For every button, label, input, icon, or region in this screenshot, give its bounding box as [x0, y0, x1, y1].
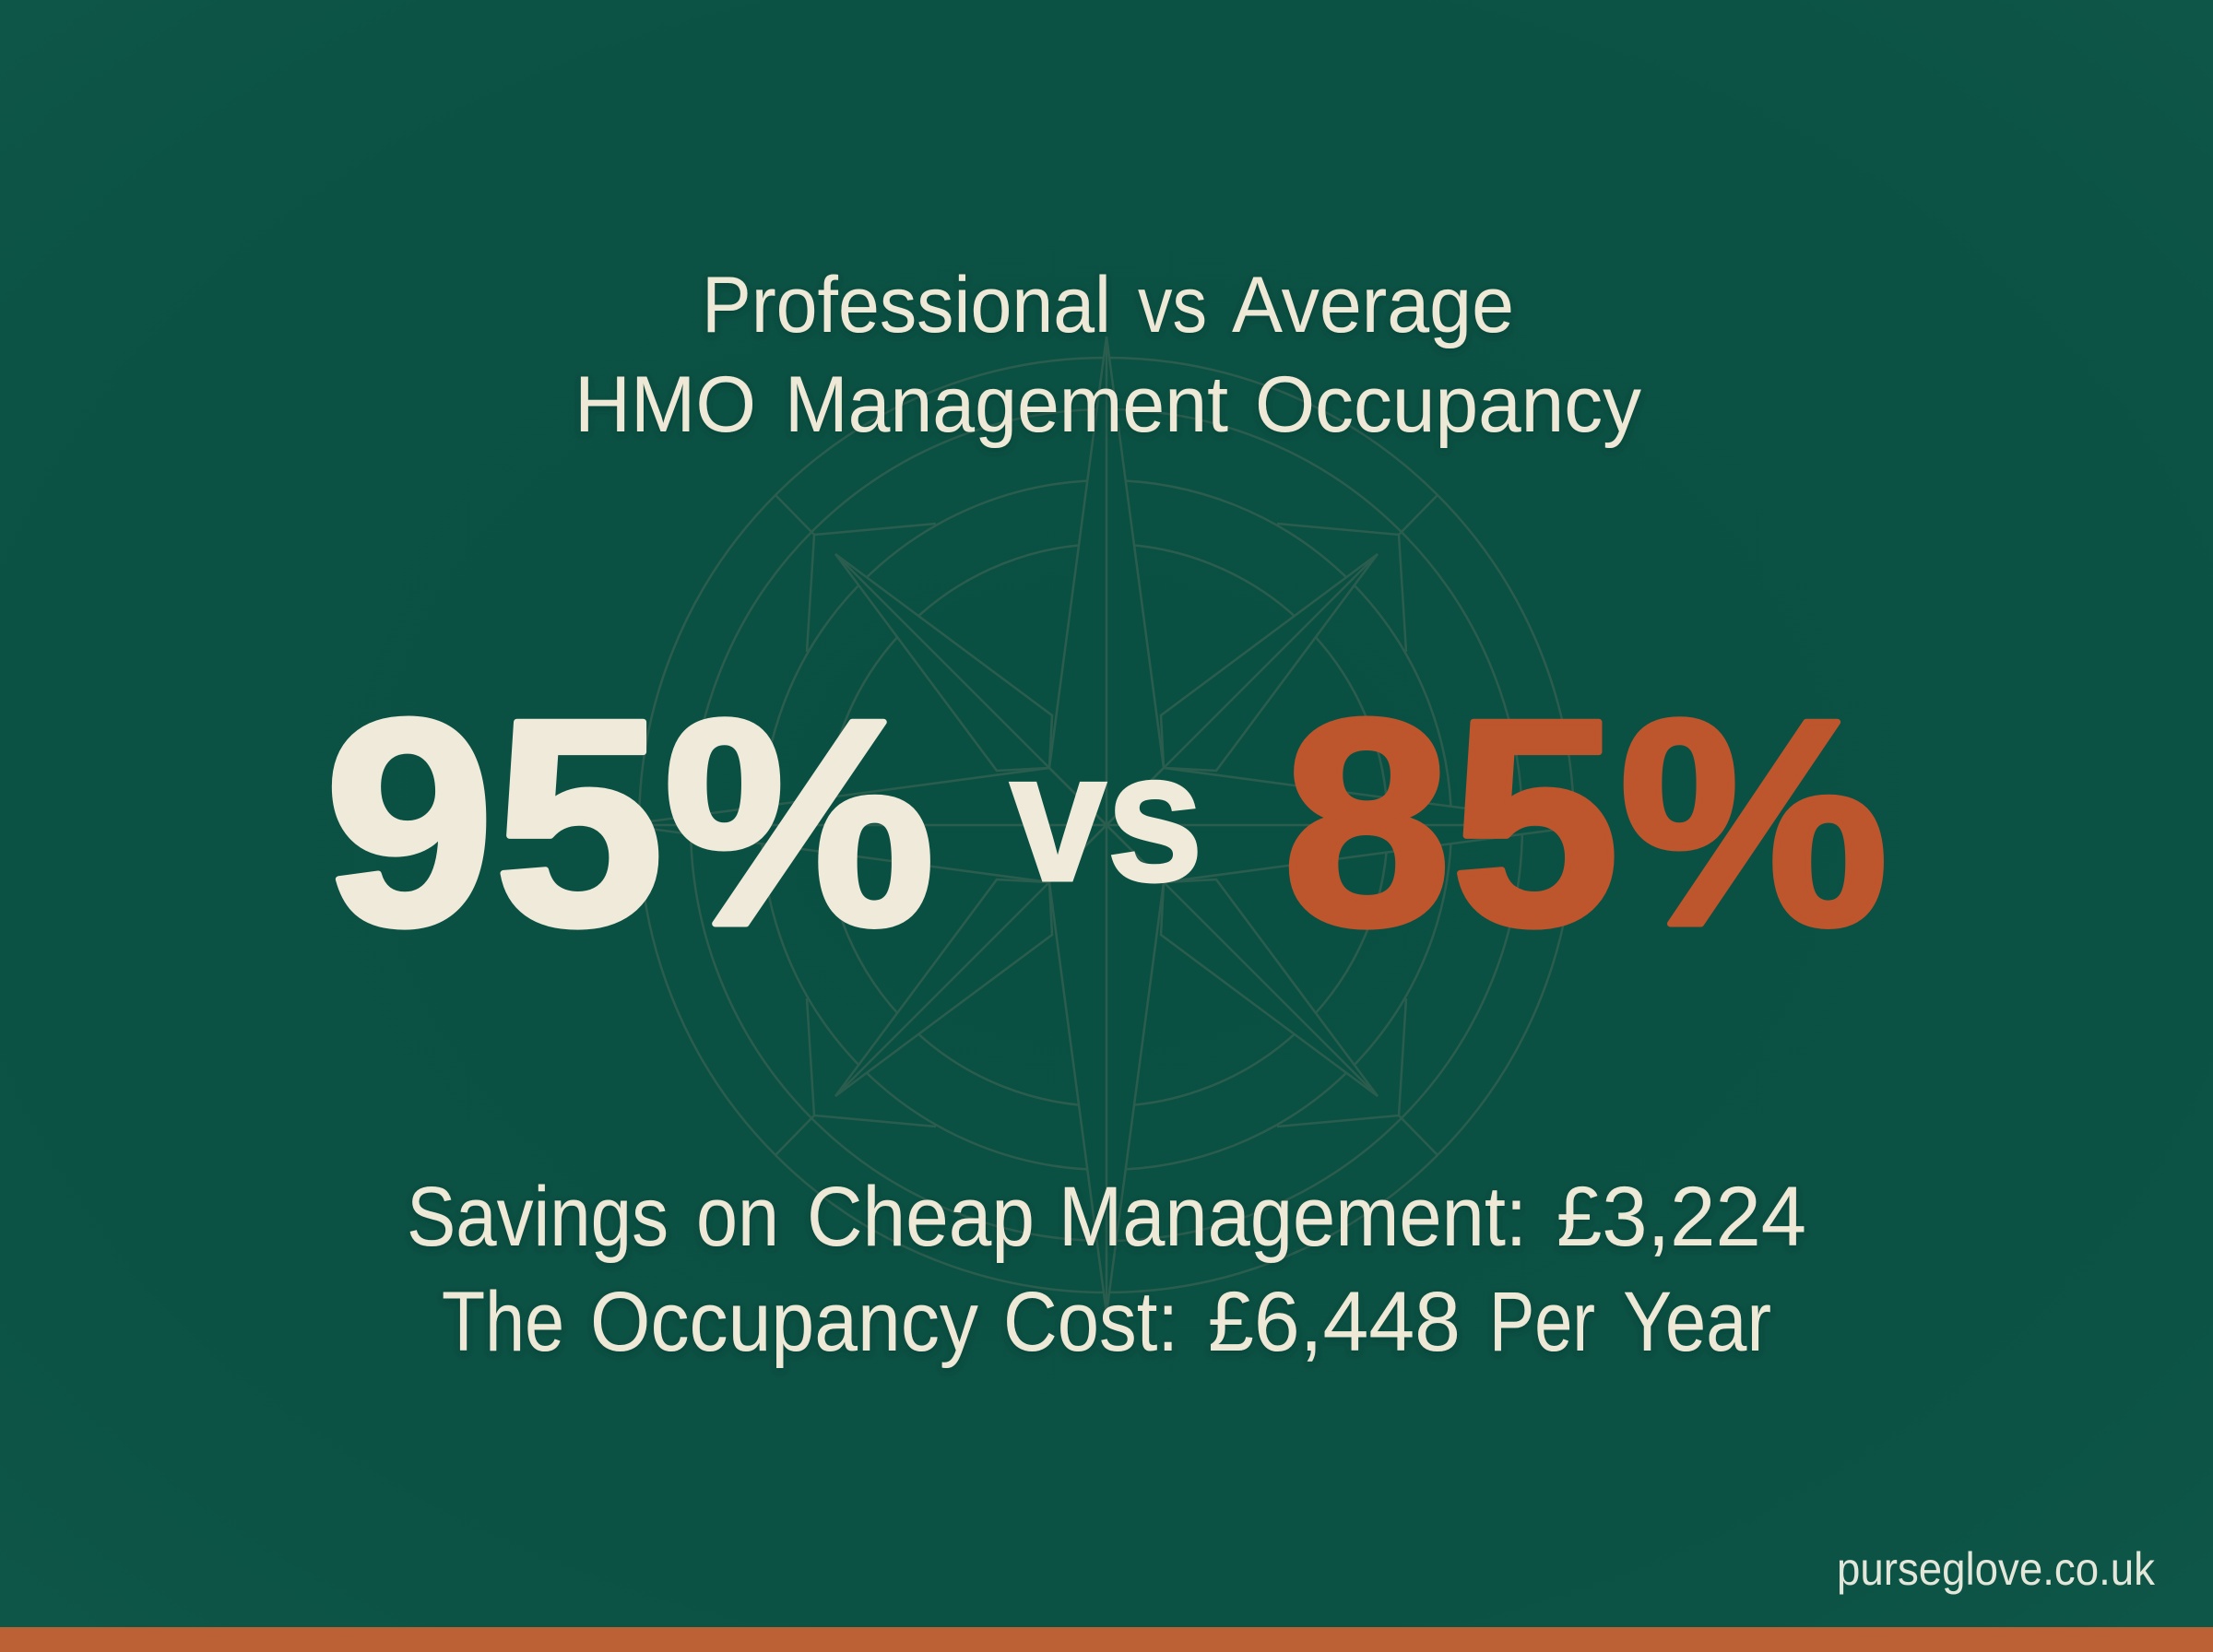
- savings and cost text: £3,224: [1556, 1170, 1806, 1264]
- orange footer bar: [0, 1627, 2213, 1652]
- title: Average: [1232, 261, 1514, 349]
- title: Professional: [702, 261, 1111, 349]
- savings and cost text: Occupancy: [590, 1275, 978, 1369]
- title: Management: [785, 360, 1228, 449]
- title: HMO: [574, 360, 756, 449]
- stat: professional 95%: 95%: [325, 659, 935, 986]
- savings and cost text: £6,448: [1208, 1275, 1461, 1369]
- stat: average 85%: 85%: [1283, 659, 1888, 986]
- title: [574, 261, 1641, 449]
- compass rose watermark: [622, 336, 1591, 1314]
- website url: purseglove.co.uk: [1837, 1543, 2156, 1595]
- title: Occupancy: [1255, 360, 1641, 449]
- savings and cost text: Cost:: [1003, 1275, 1178, 1369]
- savings and cost text: Per: [1489, 1275, 1595, 1369]
- savings and cost text: Cheap: [807, 1170, 1035, 1264]
- savings and cost text: on: [696, 1170, 779, 1264]
- vs label: vs: [1010, 714, 1203, 920]
- savings and cost text: [407, 1170, 1806, 1369]
- savings and cost text: Year: [1623, 1275, 1771, 1369]
- savings and cost text: Management:: [1059, 1170, 1527, 1264]
- savings and cost text: The: [442, 1275, 564, 1369]
- title: vs: [1138, 261, 1207, 349]
- savings and cost text: Savings: [407, 1170, 669, 1264]
- comparison figures: [325, 659, 1888, 986]
